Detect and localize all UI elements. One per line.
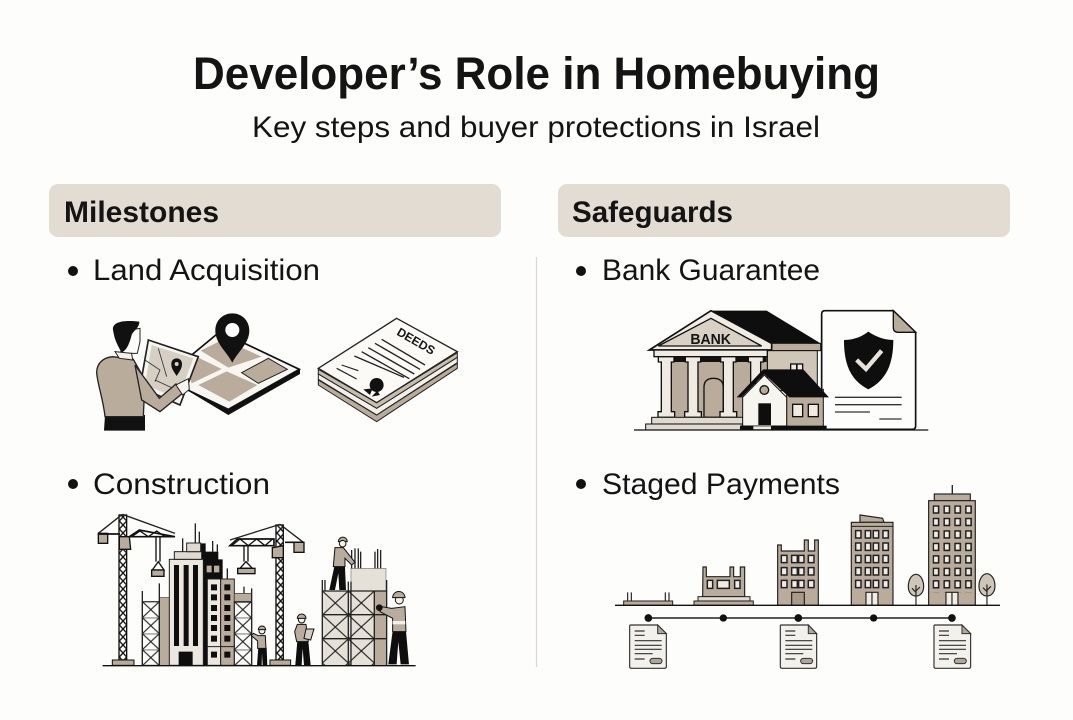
panel: safeguards	[558, 184, 1010, 668]
tower main	[169, 523, 234, 665]
location pin	[215, 313, 249, 363]
heading: safeguards	[558, 184, 1010, 237]
icon: construction site	[98, 514, 416, 666]
subtitle: Key steps and buyer protections in Israel	[252, 111, 820, 144]
stage 1 foundation	[624, 592, 673, 605]
ground line	[615, 603, 1000, 607]
icon: bank, house and guarantee document	[634, 311, 928, 430]
shield with check	[844, 332, 893, 389]
stage 5 tower with trees	[908, 485, 995, 605]
stage 3 mid-rise	[778, 540, 818, 605]
ground line	[634, 428, 928, 432]
stage 4 tall building	[851, 515, 893, 605]
ground line	[103, 664, 416, 668]
heading: milestones: Milestones	[64, 196, 219, 229]
title: Developer’s Role in Homebuying	[193, 48, 880, 99]
worker on top of scaffold	[329, 537, 355, 590]
deeds stack: DEEDS	[394, 325, 438, 358]
bullet: staged payments: Staged Payments	[602, 468, 840, 501]
house	[737, 364, 829, 430]
person reading map	[97, 321, 198, 431]
bullet: bank guarantee: Bank Guarantee	[602, 254, 820, 287]
heading: safeguards: Safeguards	[572, 196, 733, 229]
column divider	[536, 257, 538, 667]
large scaffold block	[322, 548, 387, 665]
payment document 3	[934, 625, 971, 668]
stage 2 low structure	[694, 567, 753, 605]
heading: milestones	[49, 184, 501, 237]
payment document 1	[630, 625, 666, 668]
crane left	[98, 514, 175, 665]
map platform	[163, 332, 300, 415]
timeline with milestone dots	[644, 614, 956, 622]
small worker	[251, 626, 267, 665]
bullet: construction: Construction	[93, 468, 270, 501]
deeds stack	[318, 318, 457, 422]
crane right	[230, 524, 304, 665]
bullet: land acquisition: Land Acquisition	[93, 254, 320, 287]
payment document 2	[780, 625, 817, 668]
left scaffold	[142, 583, 169, 665]
guarantee document	[822, 311, 916, 429]
bank building	[646, 311, 821, 430]
icon: staged payment timeline	[615, 485, 1000, 668]
panel: milestones	[49, 184, 501, 666]
worker with clipboard	[295, 614, 314, 665]
right scaffold	[234, 587, 252, 665]
icon: land plot map with pin and buyer	[97, 313, 457, 431]
bank building: BANK	[690, 332, 731, 348]
worker with vest	[376, 591, 409, 664]
